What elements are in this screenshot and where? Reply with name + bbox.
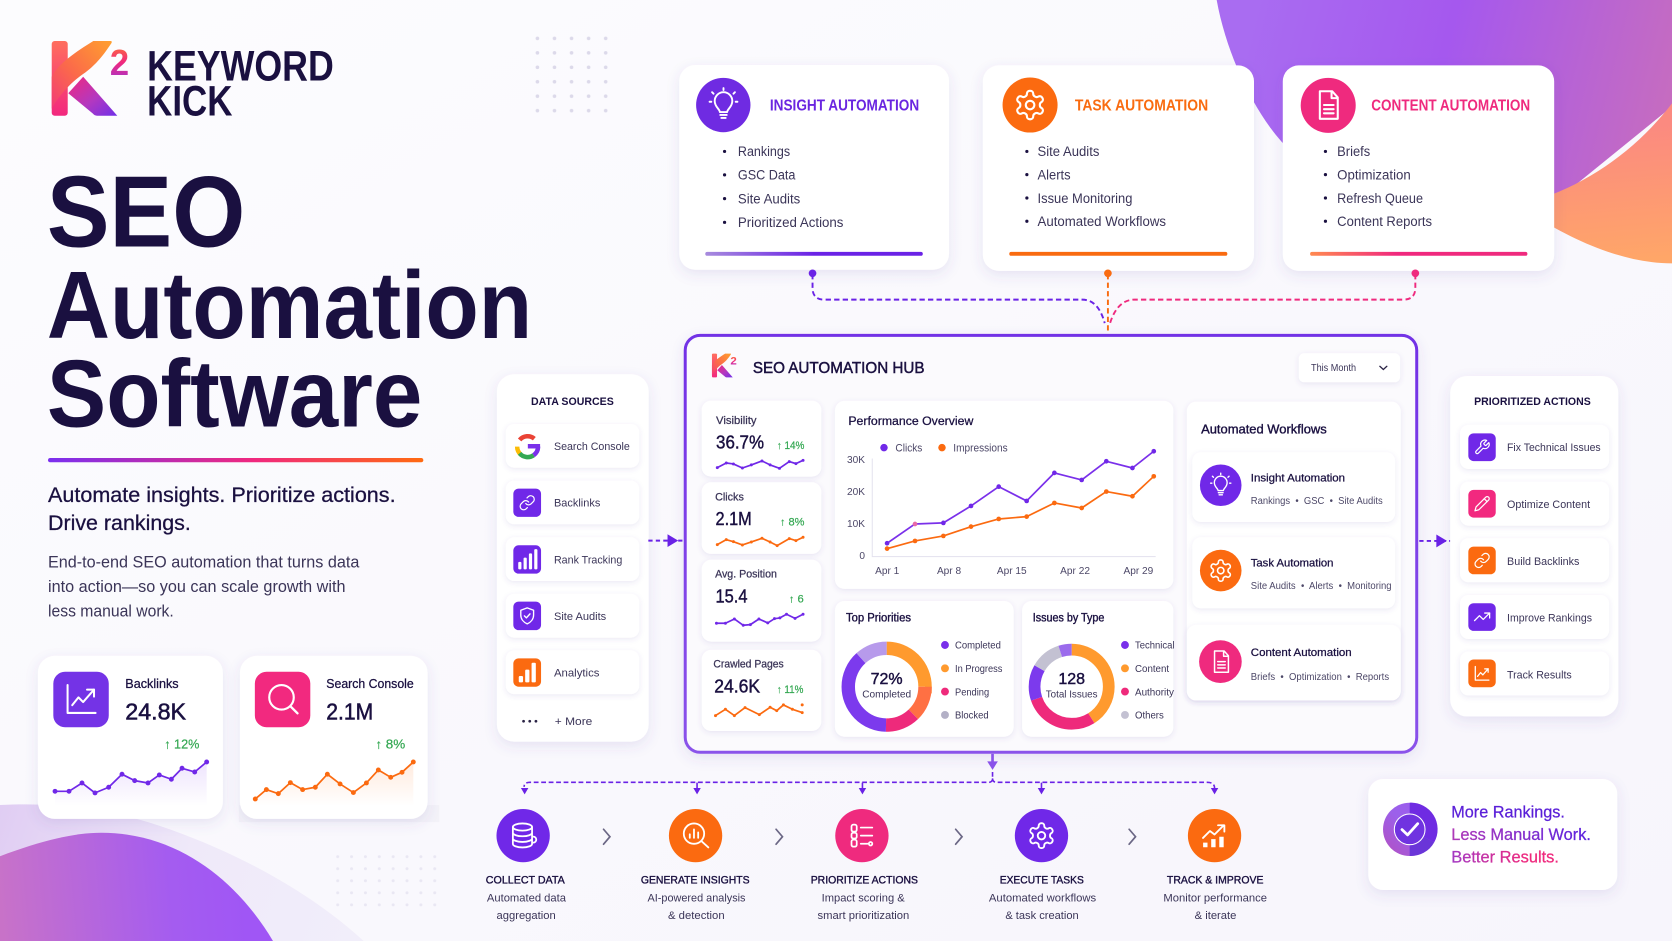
chart: Performance Overview: Clicks — [895, 443, 923, 455]
metric: Avg. Position — [702, 560, 821, 642]
source: Search Console: Search Console — [554, 441, 630, 453]
metric: Clicks: 2.1M — [716, 509, 752, 529]
stat card: Search Console: Search Console — [326, 676, 414, 691]
title — [47, 155, 532, 448]
icon: check badge — [1383, 803, 1438, 856]
action: Fix Technical Issues — [1460, 425, 1609, 469]
workflow step: Collect Data: COLLECT DATA — [486, 875, 565, 887]
tagline: Automate insights. Prioritize actions. — [48, 484, 396, 507]
card: Content Automation: Refresh Queue — [1337, 190, 1423, 206]
description: into action—so you can scale growth with — [48, 577, 345, 596]
workflow: Content Automation: Content Automation — [1251, 647, 1352, 659]
workflow: Insight Automation: Insight Automation — [1251, 472, 1345, 484]
workflow step: Generate Insights: GENERATE INSIGHTS — [641, 875, 750, 887]
chart: Performance Overview: 20K — [847, 487, 865, 498]
card: Task Automation: TASK AUTOMATION — [1075, 98, 1208, 115]
metric: Crawled Pages: ↑ 11% — [777, 684, 804, 696]
action: Build Backlinks: Build Backlinks — [1507, 556, 1579, 568]
stat card: Search Console: ↑ 8% — [375, 737, 405, 752]
card: Task Automation: Alerts — [1038, 166, 1071, 182]
workflow: Content Automation — [1187, 625, 1401, 701]
workflow: Task Automation: Site Audits • Alerts • Monitoring — [1251, 581, 1392, 592]
metric: Crawled Pages — [702, 650, 821, 731]
chart: Performance Overview: Apr 1 — [875, 566, 900, 577]
workflow step: Track & Improve: TRACK & IMPROVE — [1167, 875, 1263, 887]
chart: Issues by Type donut: Content — [1135, 664, 1169, 675]
source: Site Audits: Site Audits — [554, 611, 607, 623]
chart: Top Priorities donut: 72% — [871, 671, 903, 688]
date dropdown: This Month — [1311, 363, 1356, 374]
tagline — [48, 484, 396, 535]
workflow step: Collect Data — [486, 809, 567, 922]
source: More — [522, 716, 592, 728]
panel: Automated Workflows — [1187, 402, 1401, 701]
decoration: top-right gradient blob — [1217, 0, 1672, 263]
chart: Performance Overview: 0 — [859, 551, 865, 562]
card: Insight Automation: Rankings — [738, 143, 790, 159]
chart: Top Priorities donut: Completed — [862, 689, 911, 700]
chart: Issues by Type donut: Total Issues — [1046, 689, 1098, 700]
workflow step: Execute Tasks: EXECUTE TASKS — [1000, 875, 1084, 887]
chart: Performance Overview: Impressions — [953, 443, 1008, 455]
workflow step: Track & Improve — [1163, 809, 1267, 922]
description: less manual work. — [48, 601, 174, 620]
title: Software — [47, 341, 422, 448]
action: Build Backlinks — [1460, 538, 1609, 582]
source: Rank Tracking: Rank Tracking — [554, 554, 622, 566]
panel: Automated Workflows: Automated Workflows — [1201, 421, 1327, 436]
callout: More Rankings: Less Manual Work. — [1451, 825, 1591, 844]
card: Content Automation: Optimization — [1337, 166, 1411, 182]
hub logo — [712, 354, 737, 377]
chart: Performance Overview — [835, 401, 1173, 589]
stat card: Backlinks: 24.8K — [125, 699, 186, 725]
arrow: hub to prioritized actions — [1419, 535, 1450, 547]
workflow step: Execute Tasks: & task creation — [1005, 910, 1079, 922]
card: Insight Automation: GSC Data — [738, 167, 796, 183]
metric: Clicks: Clicks — [715, 492, 744, 504]
source: Backlinks: Backlinks — [554, 497, 601, 509]
action: Optimize Content: Optimize Content — [1507, 499, 1590, 511]
stat card: Backlinks: ↑ 12% — [164, 737, 199, 752]
panel: Prioritized Actions: PRIORITIZED ACTIONS — [1474, 396, 1591, 408]
chart: Issues by Type donut: Technical — [1135, 641, 1174, 652]
source: More: + More — [555, 716, 592, 728]
callout: More Rankings: Better Results. — [1451, 848, 1559, 867]
workflow step: Execute Tasks — [989, 809, 1097, 922]
stat card: Backlinks: Backlinks — [125, 676, 179, 691]
action: Improve Rankings: Improve Rankings — [1507, 613, 1592, 625]
workflow step: Prioritize Actions: PRIORITIZE ACTIONS — [811, 875, 918, 887]
chart: Issues by Type donut: Authority — [1135, 687, 1175, 698]
workflow: Task Automation: Task Automation — [1251, 558, 1333, 570]
workflow: Insight Automation: Rankings • GSC • Site Audits — [1251, 496, 1383, 507]
metric: Crawled Pages: 24.6K — [714, 677, 760, 697]
chart: Top Priorities donut: Pending — [955, 687, 989, 698]
chart: Issues by Type donut: Others — [1135, 711, 1164, 722]
chart: Performance Overview: Apr 8 — [937, 566, 961, 577]
workflow step: Generate Insights: & detection — [668, 910, 725, 922]
workflow: Content Automation: Briefs • Optimization • Reports — [1251, 672, 1389, 683]
stat card: Backlinks — [38, 656, 223, 819]
panel: Data Sources — [497, 374, 649, 742]
card: Task Automation: Site Audits — [1038, 143, 1099, 159]
chart: Performance Overview: 10K — [847, 519, 865, 530]
workflow step: Track & Improve: Monitor performance — [1163, 893, 1267, 905]
card: Content Automation: Briefs — [1337, 143, 1370, 159]
chevron — [1129, 829, 1136, 844]
decoration: bottom-left gradient blobs — [0, 804, 364, 941]
card: Insight Automation: Prioritized Actions — [738, 214, 844, 230]
workflow step: Track & Improve: & iterate — [1195, 910, 1236, 922]
chart: Issues by Type donut: Issues by Type — [1033, 612, 1104, 625]
tagline: Drive rankings. — [48, 512, 191, 535]
description: End-to-end SEO automation that turns data — [48, 552, 360, 571]
chart: Top Priorities donut — [835, 601, 1014, 737]
workflow step: Generate Insights: AI-powered analysis — [648, 893, 746, 905]
action: Fix Technical Issues: Fix Technical Issues — [1507, 442, 1601, 454]
action: Optimize Content — [1460, 482, 1609, 526]
card: Task Automation: Issue Monitoring — [1038, 190, 1132, 206]
stat card: Search Console: 2.1M — [326, 699, 373, 725]
chevron — [604, 829, 610, 844]
source: Rank Tracking — [506, 537, 639, 581]
action: Track Results: Track Results — [1507, 669, 1572, 681]
chart: Performance Overview: Apr 29 — [1124, 566, 1154, 577]
title: Automation — [47, 252, 532, 359]
title: SEO — [47, 155, 245, 268]
source: Analytics — [506, 650, 639, 694]
chart: Performance Overview: Apr 22 — [1060, 566, 1090, 577]
workflow step: Execute Tasks: Automated workflows — [989, 893, 1097, 905]
connectors: hub to workflow steps — [521, 754, 1218, 794]
workflow step: Prioritize Actions — [811, 809, 918, 922]
logo: Keyword Kick — [52, 41, 334, 126]
hub logo: 2 — [730, 355, 737, 367]
metric: Crawled Pages: Crawled Pages — [713, 658, 784, 670]
arrow: data sources to hub — [648, 534, 682, 547]
metric: Avg. Position: 15.4 — [716, 586, 747, 606]
chevron — [776, 829, 782, 844]
panel: Data Sources: DATA SOURCES — [531, 396, 614, 408]
source: Analytics: Analytics — [554, 668, 600, 680]
workflow: Task Automation — [1192, 537, 1395, 608]
metric: Avg. Position: ↑ 6 — [789, 593, 804, 605]
metric: Avg. Position: Avg. Position — [715, 568, 777, 580]
chart: Top Priorities donut: Completed — [955, 641, 1001, 652]
card: Task Automation: Automated Workflows — [1038, 213, 1166, 229]
hub heading: SEO AUTOMATION HUB — [753, 360, 925, 377]
card: Content Automation: CONTENT AUTOMATION — [1371, 98, 1530, 115]
workflow step: Collect Data: Automated data — [487, 893, 567, 905]
workflow step: Generate Insights — [641, 809, 750, 922]
source: Backlinks — [506, 481, 639, 524]
metric: Clicks: ↑ 8% — [780, 517, 805, 529]
action: Track Results — [1460, 652, 1609, 696]
chart: Performance Overview: Apr 15 — [997, 566, 1027, 577]
panel: SEO Automation Hub — [685, 335, 1417, 752]
card: Task Automation — [983, 65, 1254, 271]
callout: More Rankings — [1368, 779, 1617, 890]
workflow: Insight Automation — [1192, 452, 1395, 522]
chart: Top Priorities donut: Top Priorities — [846, 612, 911, 625]
chart: Top Priorities donut: In Progress — [955, 664, 1002, 675]
logo: Keyword Kick: KICK — [147, 78, 233, 126]
description — [48, 552, 360, 620]
workflow step: Prioritize Actions: Impact scoring & — [822, 893, 905, 905]
logo: Keyword Kick: KEYWORD — [147, 43, 334, 91]
workflow step: Prioritize Actions: smart prioritization — [817, 910, 909, 922]
panel: Prioritized Actions — [1450, 376, 1618, 717]
action: Improve Rankings — [1460, 595, 1609, 639]
card: Content Automation — [1283, 65, 1554, 271]
chart: Top Priorities donut: Blocked — [955, 711, 989, 722]
title underline — [48, 458, 423, 462]
metric: Visibility — [702, 401, 821, 477]
logo: Keyword Kick: 2 — [110, 42, 129, 83]
metric: Visibility: ↑ 14% — [777, 440, 805, 452]
card: Insight Automation: Site Audits — [738, 190, 800, 206]
date dropdown — [1299, 353, 1400, 382]
chart: Performance Overview: 30K — [847, 455, 865, 466]
callout: More Rankings: More Rankings. — [1451, 802, 1565, 821]
card: Insight Automation: INSIGHT AUTOMATION — [770, 98, 919, 115]
workflow step: Collect Data: aggregation — [497, 910, 556, 922]
chart: Issues by Type donut — [1022, 601, 1175, 737]
chart: Performance Overview: Performance Overview — [848, 414, 973, 428]
chart: Issues by Type donut: 128 — [1058, 671, 1085, 688]
metric: Visibility: Visibility — [716, 415, 757, 427]
card: Insight Automation — [679, 65, 949, 270]
metric: Clicks — [702, 482, 821, 554]
metric: Visibility: 36.7% — [716, 432, 764, 452]
source: Site Audits — [506, 594, 639, 638]
source: Search Console — [506, 424, 639, 468]
stat card: Search Console — [240, 656, 428, 819]
connectors: automation cards to hub — [809, 269, 1419, 334]
chevron — [956, 829, 962, 844]
card: Content Automation: Content Reports — [1337, 213, 1432, 229]
